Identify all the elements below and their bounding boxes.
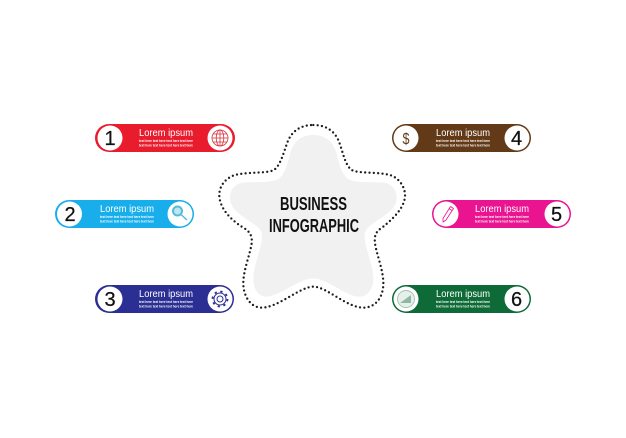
panel: step 1: [95, 124, 235, 152]
panel: step 2: Lorem ipsum: [100, 203, 154, 215]
panel: step 2: text here text here text here text here: [100, 215, 154, 219]
title: INFOGRAPHIC: [269, 216, 359, 236]
icon: gear: [212, 292, 228, 306]
icon: globe: [212, 130, 228, 146]
panel: step 5: text here text here text here text here: [475, 215, 529, 219]
panel: step 4: Lorem ipsum: [436, 127, 490, 139]
panel: step 3: 3: [104, 289, 116, 311]
star dotted outline: [219, 125, 405, 308]
panel: step 6: text here text here text here text here: [436, 304, 490, 308]
icon: magnifier: [173, 206, 187, 220]
title: BUSINESS: [280, 194, 347, 214]
panel: step 5: [432, 200, 571, 228]
panel: step 3: text here text here text here text here: [139, 304, 193, 308]
panel: step 2: [55, 200, 194, 228]
panel: step 6: text here text here text here text here: [436, 300, 490, 304]
panel: step 3: text here text here text here text here: [139, 300, 193, 304]
panel: step 4: text here text here text here text here: [436, 139, 490, 143]
icon: pencil: [443, 206, 454, 222]
panel: step 1: Lorem ipsum: [139, 127, 193, 139]
title: [269, 194, 359, 236]
panel: step 2: 2: [64, 204, 76, 226]
panel: step 6: 6: [511, 289, 522, 311]
star background: [230, 135, 397, 297]
panel: step 5: Lorem ipsum: [475, 203, 529, 215]
panel: step 6: [392, 285, 531, 313]
panel: step 4: [392, 124, 531, 152]
panel: step 4: text here text here text here text here: [436, 144, 490, 148]
panel: step 5: 5: [551, 204, 562, 226]
panel: step 1: text here text here text here text here: [139, 139, 193, 143]
panel: step 3: [95, 285, 234, 313]
panel: step 4: 4: [511, 128, 522, 150]
panel: step 1: text here text here text here text here: [139, 144, 193, 148]
panel: step 6: Lorem ipsum: [436, 288, 490, 300]
panel: step 3: Lorem ipsum: [139, 288, 193, 300]
panel: step 1: 1: [104, 128, 116, 150]
panel: step 2: text here text here text here text here: [100, 220, 154, 224]
panel: step 5: text here text here text here text here: [475, 220, 529, 224]
icon: dollar: $: [402, 131, 410, 148]
icon: growth chart: [398, 290, 414, 308]
